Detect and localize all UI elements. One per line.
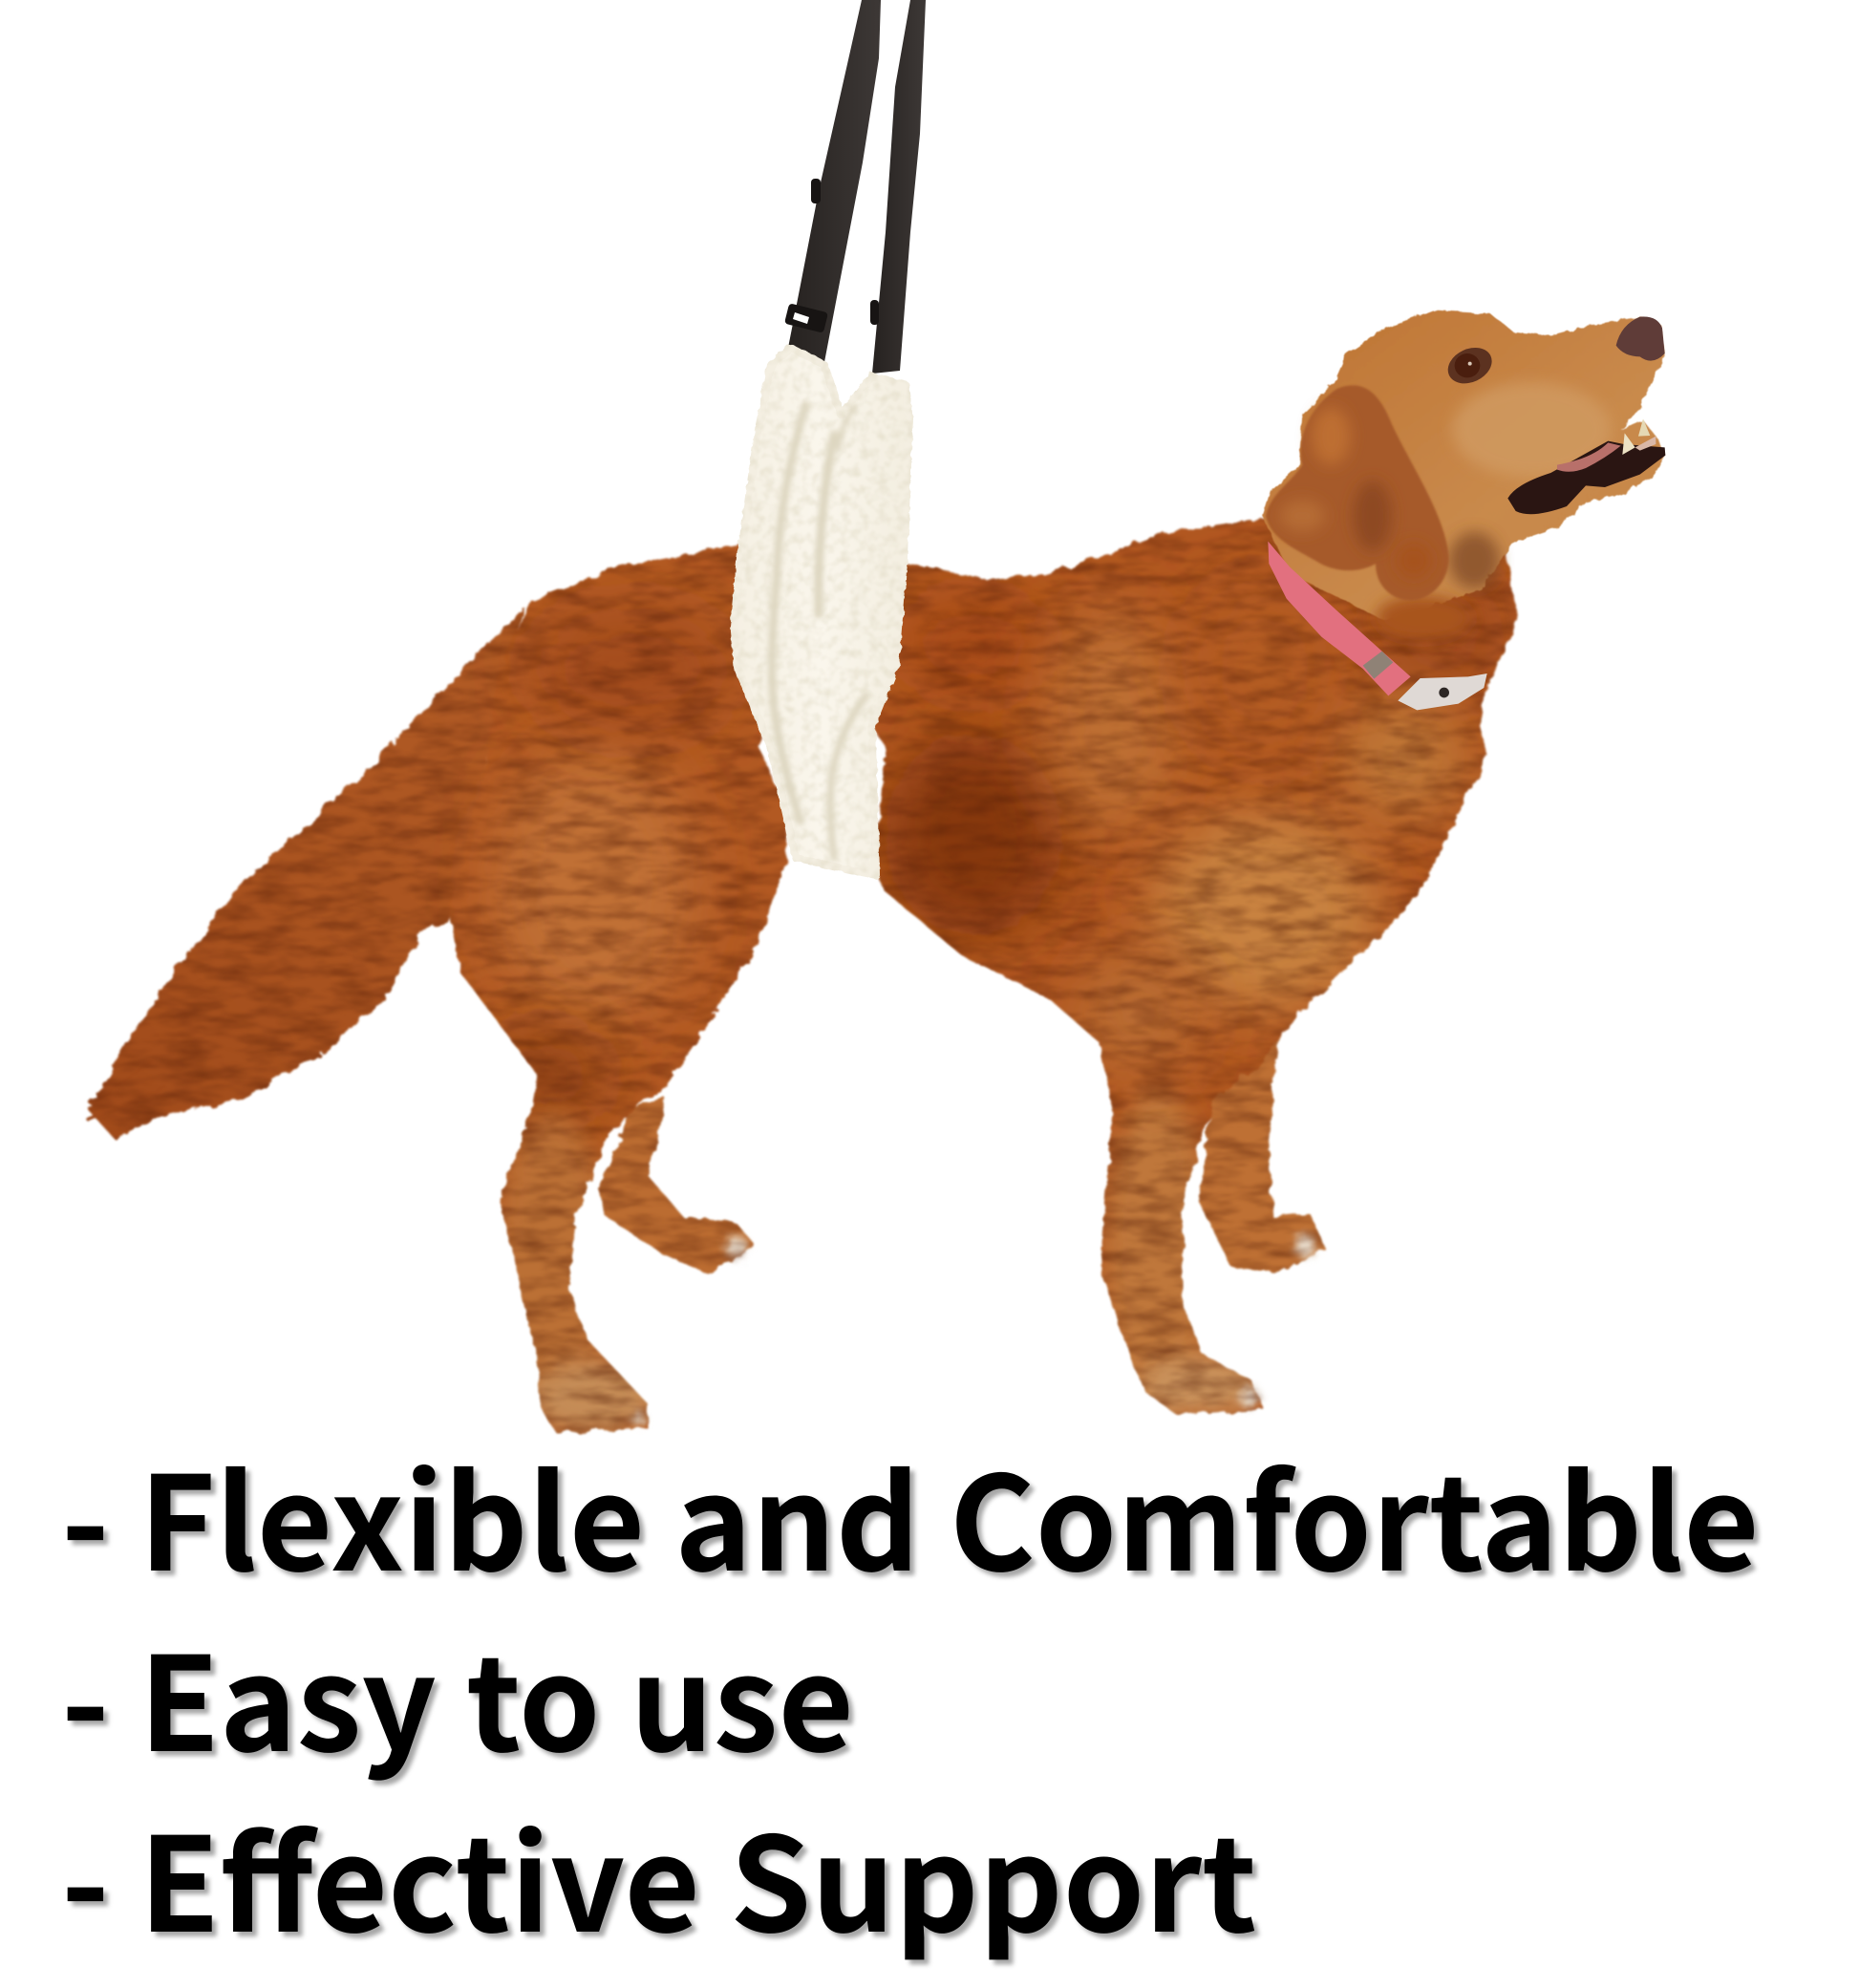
eye bbox=[1442, 341, 1498, 391]
dog figure bbox=[89, 0, 1665, 1436]
far front leg bbox=[1202, 1037, 1321, 1271]
paw highlights bbox=[632, 1234, 1316, 1425]
text: benefit 1: - Flexible and Comfortable bbox=[61, 1420, 1760, 1609]
far hind leg bbox=[601, 1101, 753, 1271]
nose bbox=[1616, 316, 1665, 361]
fleece folds bbox=[772, 406, 866, 858]
dog head bbox=[1263, 310, 1665, 710]
text: benefit 3: - Effective Support bbox=[61, 1781, 1257, 1970]
strap buckles bbox=[784, 179, 879, 333]
fleece sling bbox=[734, 348, 909, 875]
collar bbox=[1268, 542, 1487, 710]
muzzle highlight bbox=[1452, 382, 1612, 478]
ear bbox=[1266, 385, 1449, 600]
text: benefit 2: - Easy to use bbox=[61, 1600, 854, 1789]
dog body and legs bbox=[89, 519, 1518, 1436]
torso, chest and near front leg bbox=[860, 519, 1518, 1414]
head shape bbox=[1263, 310, 1665, 621]
throat shading bbox=[1376, 532, 1500, 640]
right strap bbox=[872, 0, 926, 374]
tail bbox=[89, 607, 524, 1138]
fur shading bbox=[481, 563, 1505, 1436]
open mouth bbox=[1507, 418, 1665, 514]
hindquarters and near hind leg bbox=[449, 544, 809, 1433]
tail tip hairs bbox=[89, 1062, 164, 1120]
harness straps bbox=[784, 0, 926, 374]
left strap bbox=[788, 0, 881, 362]
illustration: dog in lifting harness bbox=[84, 0, 1666, 1437]
